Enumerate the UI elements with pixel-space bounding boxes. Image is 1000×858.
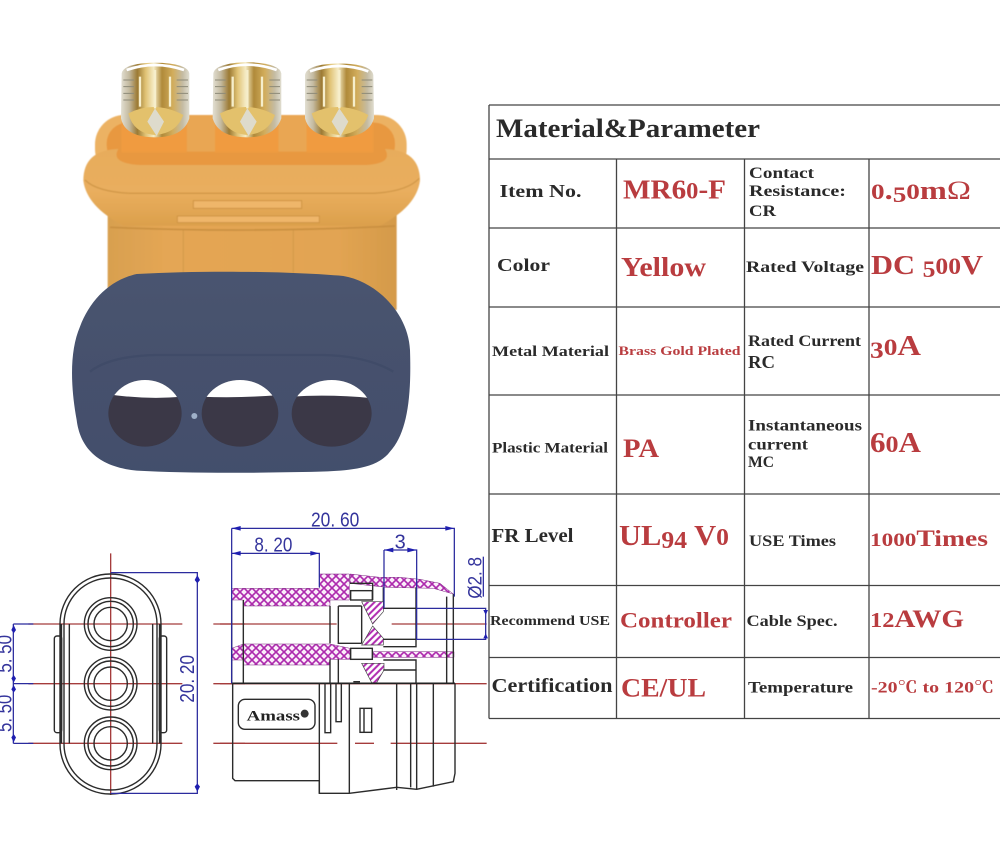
row: recommended use [490, 606, 964, 633]
row: certification: Certification [492, 675, 612, 697]
logo badge: Amass [247, 709, 300, 725]
row: FR level: 1000 Times [870, 526, 988, 551]
row: metal material: Rated Current [748, 333, 862, 350]
lower body outline [233, 683, 455, 793]
row: recommended use: Recommend USE [490, 613, 610, 628]
row: FR level: USE Times [749, 533, 836, 550]
drawing: front view with dimensions [0, 553, 245, 795]
centre lines [28, 553, 245, 795]
flange ribs [193, 201, 302, 208]
dimension label 8.20: 8. 20 [254, 534, 292, 556]
pin 3 [305, 63, 374, 137]
row: item number: CR [749, 203, 777, 220]
contact circle top [84, 598, 137, 650]
row: color [497, 250, 984, 282]
row: metal material: RC [748, 352, 775, 372]
centre lines [220, 624, 487, 743]
row: metal material: Brass Gold Plated [618, 343, 741, 358]
dimension label 20.20: 20. 20 [177, 655, 199, 703]
dimension label 20.60: 20. 60 [311, 510, 359, 532]
dimension lines [11, 573, 200, 793]
row: certification: Temperature [748, 680, 853, 697]
row: plastic material: 60A [870, 428, 922, 459]
row: item number: Resistance: [749, 183, 846, 200]
row: metal material: 30A [870, 331, 922, 364]
dimension label diameter 2.8: Ø2. 8 [465, 557, 486, 599]
pin 2 [213, 62, 281, 137]
connector body [83, 115, 420, 310]
row: recommended use: Cable Spec. [746, 613, 838, 630]
row: item number: Contact [749, 165, 815, 182]
row: plastic material: current [748, 436, 809, 453]
contact sleeves [187, 115, 215, 152]
row: color: Color [497, 255, 550, 275]
pin 1 [121, 63, 189, 137]
row: FR level [492, 520, 988, 554]
logo badge [238, 699, 315, 729]
section outlines [232, 583, 455, 683]
gold pins [121, 62, 374, 137]
hatched section [232, 574, 454, 683]
row: item number: MR60-F [623, 174, 726, 204]
small window [360, 708, 372, 732]
blue rubber cap [72, 272, 410, 473]
table title: Material&Parameter [496, 114, 760, 143]
row: FR level: UL94 V0 [619, 520, 729, 554]
dimension lines [232, 526, 488, 683]
row: color: DC 500V [871, 250, 984, 282]
row: FR level: FR Level [492, 525, 574, 547]
parameter table [489, 105, 1000, 718]
contact circle bottom [84, 717, 137, 770]
row: plastic material: Instantaneous [748, 418, 862, 435]
row: plastic material: Plastic Material [492, 441, 608, 457]
row: plastic material [492, 418, 922, 471]
row: metal material [492, 331, 922, 372]
collar [95, 115, 407, 178]
row: item number: 0.50mΩ [871, 176, 971, 207]
outer housing outline [54, 574, 167, 794]
row: certification: -20℃ to 120℃ [871, 680, 994, 697]
row: certification: CE/UL [621, 674, 706, 703]
row: item number [500, 165, 971, 220]
row: recommended use: 12AWG [870, 606, 964, 633]
row: color: Yellow [621, 252, 707, 282]
flange [83, 149, 420, 226]
product photo: MR60-F connector with blue cap [72, 62, 420, 473]
dimension label 3: 3 [395, 532, 406, 554]
drawing: side section view with dimensions [220, 510, 488, 793]
row: plastic material: MC [748, 454, 774, 471]
row: certification [492, 674, 994, 703]
table grid [489, 105, 1000, 718]
row: item number: Item No. [500, 181, 582, 201]
row: color: Rated Voltage [746, 259, 864, 276]
contact circle middle [84, 657, 137, 710]
row: plastic material: PA [623, 434, 659, 463]
row: metal material: Metal Material [492, 344, 609, 360]
row: recommended use: Controller [620, 608, 732, 633]
